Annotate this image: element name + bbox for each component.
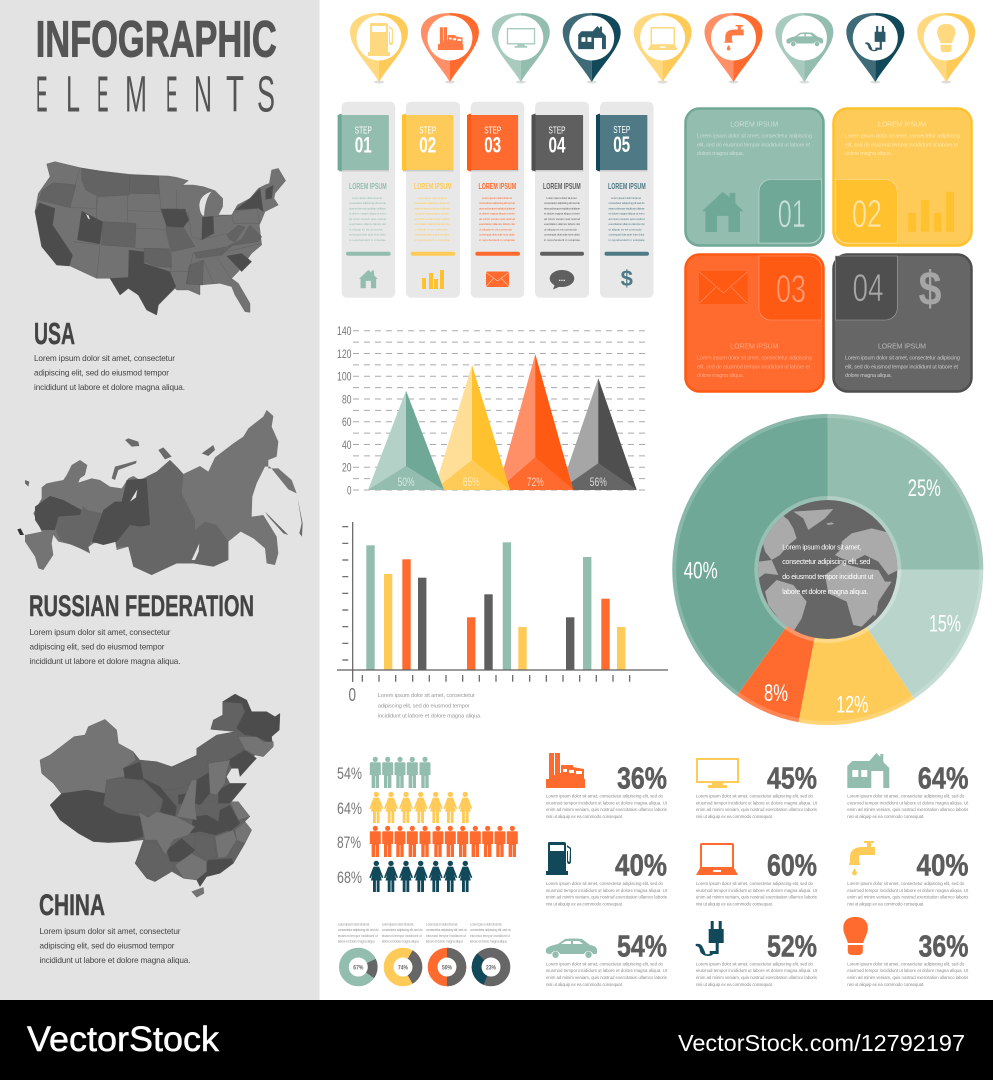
donut 50%: 50% <box>442 964 452 972</box>
step card 05: exercitation ullamco laboris nisi <box>608 222 645 226</box>
box 03: Lorem ipsum dolor sit amet, consectetur adipiscing <box>697 356 812 362</box>
step card 03: exercitation ullamco laboris nisi <box>479 222 515 226</box>
pie percentage labels <box>684 475 961 718</box>
row labels: 64% <box>337 799 362 818</box>
stat: bulb 36%: nisi ut aliquip ex ea commodo consequat. <box>847 982 924 987</box>
stat: monitor 45% <box>696 758 818 819</box>
box 01: LOREM IPSUM <box>730 122 778 128</box>
text: China description: Lorem ipsum dolor sit amet, consectetur <box>40 927 181 936</box>
step card 04: ... <box>559 274 565 283</box>
donut 74%: 74% <box>398 964 408 972</box>
stat: fuel pump 40%: enim ad minim veniam, quis nostrud exercitation ullamco laboris <box>546 895 668 900</box>
panel: numbered boxes <box>686 108 972 392</box>
box 02: LOREM IPSUM <box>878 122 926 128</box>
title second line: L <box>66 66 80 123</box>
step card 05: consequat duis aute irure dolor <box>608 232 645 236</box>
title <box>36 11 277 123</box>
step card 03: consequat duis aute irure dolor <box>479 232 515 236</box>
stat: bulb 36%: eiusmod tempor incididunt ut labore et dolore magna aliqua. Ut <box>847 968 969 973</box>
stat: factory 36%: 36% <box>617 760 667 796</box>
footer bar <box>0 1000 993 1080</box>
step card 05: consectetur adipiscing elit sed do <box>608 201 645 205</box>
y axis labels <box>337 324 352 497</box>
globe caption: labore et dolore magna aliqua. <box>782 589 868 596</box>
text: USA description: adipiscing elit, sed do eiusmod tempor <box>34 368 169 378</box>
stat: house 64%: eiusmod tempor incididunt ut labore et dolore magna aliqua. Ut <box>847 800 969 805</box>
text: USA description: incididunt ut labore et dolore magna aliqua. <box>34 383 185 392</box>
pyramid 50%: 50% <box>398 475 415 489</box>
step card 01: ut aliquip ex ea commodo <box>349 228 383 232</box>
stat: bulb 36%: Lorem ipsum dolor sit amet, consectetur adipiscing elit, sed do <box>847 961 965 966</box>
left panel <box>0 0 320 1000</box>
step card 03: ad minim veniam quis nostrud <box>479 217 515 221</box>
text: USA description <box>34 354 185 392</box>
stat: car 54%: Lorem ipsum dolor sit amet, consectetur adipiscing elit, sed do <box>546 961 664 966</box>
stat: house 64%: Lorem ipsum dolor sit amet, consectetur adipiscing elit, sed do <box>847 794 965 798</box>
stat: bulb 36%: 36% <box>918 928 968 964</box>
step card 05: et dolore magna aliqua ut enim <box>608 212 645 216</box>
bar chart caption: Lorem ipsum dolor sit amet, consectetur <box>378 693 475 699</box>
donut captions: labore et dolore magna aliqua <box>382 940 419 944</box>
pie percentage labels: 8% <box>764 680 788 707</box>
map: USA <box>35 162 286 315</box>
step card 04: Lorem ipsum dolor sit amet <box>546 196 577 200</box>
donut captions: Lorem ipsum dolor sit amet, <box>382 922 414 926</box>
stat: laptop 60%: enim ad minim veniam, quis nostrud exercitation ullamco laboris <box>696 895 818 900</box>
text: China description: adipiscing elit, sed do eiusmod tempor <box>40 942 175 950</box>
step card 03: ut aliquip ex ea commodo <box>479 228 512 232</box>
pie percentage labels: 25% <box>908 475 941 502</box>
donut 67% <box>339 948 377 986</box>
step card 01: consequat duis aute irure dolor <box>349 232 386 236</box>
stat: fuel pump 40%: eiusmod tempor incididunt ut labore et dolore magna aliqua. Ut <box>546 888 668 893</box>
step card 01: STEP <box>355 124 372 136</box>
donut captions: labore et dolore magna aliqua <box>338 940 375 944</box>
stat: faucet 40%: 40% <box>916 848 968 882</box>
step card 04: et dolore magna aliqua ut enim <box>544 212 581 216</box>
title second line: E <box>97 66 108 123</box>
step card 03 <box>467 102 524 298</box>
stat: house 64%: enim ad minim veniam, quis nostrud exercitation ullamco laboris <box>847 807 969 812</box>
map: China <box>40 694 280 897</box>
step card 03: eiusmod tempor incididunt ut labore <box>479 206 515 210</box>
chart: people pictogram <box>337 757 518 892</box>
stat: faucet 40% <box>847 841 969 907</box>
step card 02: Lorem ipsum dolor sit amet <box>417 196 447 200</box>
donut captions: eiusmod tempor incididunt ut <box>338 934 378 938</box>
y axis labels: 20 <box>342 461 352 475</box>
box 01 <box>686 108 824 246</box>
stat: faucet 40%: eiusmod tempor incididunt ut labore et dolore magna aliqua. Ut <box>847 888 969 893</box>
stat: laptop 60%: 60% <box>767 848 817 882</box>
text: Russia description: adipiscing elit, sed do eiusmod tempor <box>30 642 165 652</box>
row labels: 54% <box>337 764 362 783</box>
pin: factory <box>421 13 479 84</box>
y axis labels: 80 <box>342 392 352 406</box>
step card 05: in reprehenderit in voluptate <box>608 238 645 242</box>
map: Russian Federation <box>17 410 303 575</box>
text: Russia description: incididunt ut labore et dolore magna aliqua. <box>30 657 180 666</box>
pin: monitor <box>492 13 550 84</box>
box 04: $ <box>918 263 942 316</box>
footer bar: VectorStock <box>27 1020 220 1059</box>
step card 05: STEP <box>613 124 630 136</box>
step card 04: LOREM IPSUM <box>543 181 581 191</box>
donut 23% <box>472 948 510 986</box>
pie percentage labels: 12% <box>836 692 868 718</box>
title second line: E <box>166 66 178 123</box>
step card 03: 03 <box>484 132 501 158</box>
donut 74% <box>383 947 423 987</box>
step card 04: ad minim veniam quis nostrud <box>544 217 580 221</box>
box 04: 04 <box>852 267 884 310</box>
box 01: elit, sed do eiusmod tempor incididunt ut labore et <box>697 142 810 148</box>
step card 05: ad minim veniam quis nostrud <box>608 217 645 221</box>
stat: monitor 45%: nisi ut aliquip ex ea commodo consequat. <box>696 814 773 819</box>
bar chart caption: adipiscing elit, sed do eiusmod tempor <box>378 703 470 709</box>
pyramid 56%: 56% <box>590 475 607 489</box>
row 87% <box>370 826 518 857</box>
title: INFOGRAPHIC <box>36 11 277 68</box>
stat: faucet 40%: Lorem ipsum dolor sit amet, consectetur adipiscing elit, sed do <box>847 881 965 886</box>
pin: house <box>563 13 621 84</box>
box 02: dolore magna aliqua. <box>845 151 892 157</box>
stat: fuel pump 40% <box>546 842 668 907</box>
globe caption: Lorem ipsum dolor sit amet, <box>782 544 861 552</box>
chart: bar chart <box>337 522 668 720</box>
step card 02: ad minim veniam quis nostrud <box>414 217 450 221</box>
stat: plug 52%: eiusmod tempor incididunt ut labore et dolore magna aliqua. Ut <box>696 968 818 973</box>
stat: laptop 60%: Lorem ipsum dolor sit amet, consectetur adipiscing elit, sed do <box>696 881 814 886</box>
step card 04: consectetur adipiscing elit sed do <box>544 201 580 205</box>
box 02: elit, sed do eiusmod tempor incididunt ut labore et <box>845 142 958 148</box>
stat: factory 36%: nisi ut aliquip ex ea commodo consequat. <box>546 814 623 819</box>
step card 03: in reprehenderit in voluptate <box>479 238 515 242</box>
pin: fuel pump <box>350 13 408 84</box>
stat: monitor 45%: Lorem ipsum dolor sit amet, consectetur adipiscing elit, sed do <box>696 794 814 798</box>
box 04: LOREM IPSUM <box>878 344 926 350</box>
title second line: E <box>36 66 48 123</box>
y axis labels: 60 <box>342 415 352 429</box>
text: Russia description <box>30 628 180 666</box>
step card 01: ad minim veniam quis nostrud <box>349 217 386 221</box>
box 01: dolore magna aliqua. <box>697 151 744 157</box>
chart: pyramid chart <box>337 324 647 497</box>
step card 05: ut aliquip ex ea commodo <box>608 228 642 232</box>
stat: car 54% <box>546 928 668 987</box>
stat grid <box>546 753 969 987</box>
step card 05: $ <box>621 266 633 291</box>
step card 05: 05 <box>613 132 630 157</box>
stat: plug 52% <box>696 921 818 987</box>
step card 03: Lorem ipsum dolor sit amet <box>482 196 512 200</box>
donut charts with captions <box>338 922 511 987</box>
donut captions: Lorem ipsum dolor sit amet, <box>426 922 458 926</box>
step card 01: et dolore magna aliqua ut enim <box>349 212 387 216</box>
box 03: elit, sed do eiusmod tempor incididunt ut labore et <box>697 364 810 370</box>
stat: plug 52%: nisi ut aliquip ex ea commodo consequat. <box>696 982 773 987</box>
text: China description: incididunt ut labore et dolore magna aliqua. <box>40 956 190 965</box>
title second line: S <box>257 66 275 123</box>
donut captions: consectetur adipiscing elit, sed do <box>338 928 379 932</box>
step card 04: ut aliquip ex ea commodo <box>544 228 577 232</box>
stat: plug 52%: 52% <box>767 928 817 964</box>
step card 01: eiusmod tempor incididunt ut labore <box>349 206 386 210</box>
box 04: dolore magna aliqua. <box>845 373 892 379</box>
stat: plug 52%: enim ad minim veniam, quis nostrud exercitation ullamco laboris <box>696 975 818 980</box>
pin: plug <box>846 13 904 84</box>
y axis labels: 40 <box>342 438 352 452</box>
donut captions: eiusmod tempor incididunt ut <box>470 934 510 938</box>
box 03 <box>686 254 824 392</box>
pin: light bulb <box>917 13 975 84</box>
title second line <box>36 66 275 123</box>
stat: factory 36%: eiusmod tempor incididunt ut labore et dolore magna aliqua. Ut <box>546 800 668 805</box>
pie percentage labels: 15% <box>929 610 961 638</box>
title second line: N <box>194 66 212 123</box>
box 04: Lorem ipsum dolor sit amet, consectetur adipiscing <box>845 356 960 362</box>
step card 02: 02 <box>419 132 436 158</box>
stat: plug 52%: Lorem ipsum dolor sit amet, consectetur adipiscing elit, sed do <box>696 961 814 966</box>
donut 67%: 67% <box>353 964 363 972</box>
step card 02: et dolore magna aliqua ut enim <box>414 212 450 216</box>
step card 01: 01 <box>355 132 372 158</box>
stat: car 54%: 54% <box>617 928 667 964</box>
donut captions: labore et dolore magna aliqua <box>470 940 507 944</box>
donut captions <box>338 922 511 944</box>
row labels: 87% <box>337 833 361 852</box>
text: China description <box>40 927 190 965</box>
donut captions: consectetur adipiscing elit, sed do <box>382 928 423 932</box>
pyramid 65% <box>434 365 510 490</box>
step card 04: 04 <box>548 132 566 158</box>
pin: faucet <box>704 13 762 84</box>
y axis labels: 120 <box>337 347 352 361</box>
pin: car <box>775 13 833 84</box>
box 02: Lorem ipsum dolor sit amet, consectetur adipiscing <box>845 134 960 140</box>
stat: fuel pump 40%: nisi ut aliquip ex ea commodo consequat. <box>546 902 623 907</box>
pyramid 50% <box>368 391 444 490</box>
row 68% <box>369 861 472 892</box>
stat: car 54%: nisi ut aliquip ex ea commodo consequat. <box>546 982 623 987</box>
donut 50% <box>433 953 461 981</box>
step card 01 <box>338 102 395 298</box>
step card 03: et dolore magna aliqua ut enim <box>479 212 516 216</box>
stat: factory 36%: enim ad minim veniam, quis nostrud exercitation ullamco laboris <box>546 807 668 812</box>
step card 03: STEP <box>484 124 501 136</box>
donut captions: Lorem ipsum dolor sit amet, <box>338 922 370 926</box>
stat: factory 36% <box>546 753 668 819</box>
stat: laptop 60% <box>696 843 818 907</box>
step card 03: consectetur adipiscing elit sed do <box>479 201 515 205</box>
pyramid 72% <box>498 354 573 490</box>
pyramid 72%: 72% <box>527 475 544 489</box>
step card 04: exercitation ullamco laboris nisi <box>544 222 580 226</box>
title second line: T <box>226 66 244 123</box>
step card 02 <box>402 102 460 298</box>
box 04 <box>834 254 972 392</box>
step card 04: in reprehenderit in voluptate <box>544 238 580 242</box>
y axis labels: 140 <box>337 324 352 338</box>
donut captions: eiusmod tempor incididunt ut <box>382 934 422 938</box>
step card 01: Lorem ipsum dolor sit amet <box>352 196 382 200</box>
step card 02: STEP <box>419 124 436 136</box>
box 01: 01 <box>778 193 806 236</box>
chart: donut pie with globe <box>672 414 983 725</box>
pyramid 65%: 65% <box>463 475 480 489</box>
box 02: 02 <box>852 193 882 236</box>
globe <box>755 500 902 639</box>
step card 05: Lorem ipsum dolor sit amet <box>611 196 641 200</box>
axis zero label: 0 <box>349 685 356 705</box>
stat: car 54%: eiusmod tempor incididunt ut labore et dolore magna aliqua. Ut <box>546 968 668 973</box>
panel: step cards <box>338 102 654 298</box>
step card 02: consequat duis aute irure dolor <box>414 232 450 236</box>
y axis labels: 0 <box>347 483 352 497</box>
donut captions: consectetur adipiscing elit, sed do <box>470 928 511 932</box>
step card 02: consectetur adipiscing elit sed do <box>414 201 450 205</box>
row labels <box>337 764 362 887</box>
heading: Russian Federation: RUSSIAN FEDERATION <box>29 590 254 623</box>
donut 23%: 23% <box>486 964 496 972</box>
stat: house 64%: nisi ut aliquip ex ea commodo consequat. <box>847 814 924 819</box>
stat: monitor 45%: eiusmod tempor incididunt ut labore et dolore magna aliqua. Ut <box>696 800 818 805</box>
donut captions: consectetur adipiscing elit, sed do <box>426 928 467 932</box>
stat: house 64%: 64% <box>918 760 968 796</box>
pyramid 56% <box>560 378 637 490</box>
step card 01: consectetur adipiscing elit sed do <box>349 201 386 205</box>
step card 05 <box>596 102 654 298</box>
donut captions: eiusmod tempor incididunt ut <box>426 934 466 938</box>
step card 04: eiusmod tempor incididunt ut labore <box>544 206 580 210</box>
box 02 <box>834 108 972 246</box>
stat: faucet 40%: enim ad minim veniam, quis nostrud exercitation ullamco laboris <box>847 895 969 900</box>
donut captions: Lorem ipsum dolor sit amet, <box>470 922 502 926</box>
globe caption: consectetur adipiscing elit, sed <box>782 559 870 566</box>
step card 05: eiusmod tempor incididunt ut labore <box>608 206 645 210</box>
stat: laptop 60%: nisi ut aliquip ex ea commodo consequat. <box>696 902 773 907</box>
step card 01: exercitation ullamco laboris nisi <box>349 222 386 226</box>
step card 04: consequat duis aute irure dolor <box>544 232 580 236</box>
heading: USA: USA <box>34 316 75 351</box>
text: Russia description: Lorem ipsum dolor sit amet, consectetur <box>30 628 171 637</box>
step card 02: ut aliquip ex ea commodo <box>414 228 448 232</box>
pin: laptop <box>634 13 692 84</box>
heading: China: CHINA <box>39 889 105 922</box>
stat: house 64% <box>847 753 969 819</box>
pie percentage labels: 40% <box>684 558 718 584</box>
box 03: 03 <box>776 268 806 311</box>
footer bar: VectorStock.com/12792197 <box>678 1030 965 1056</box>
row 64% <box>369 792 472 823</box>
globe caption: do eiusmod tempor incididunt ut <box>782 574 873 581</box>
box 04: elit, sed do eiusmod tempor incididunt ut labore et <box>845 364 958 370</box>
step card 03: LOREM IPSUM <box>478 181 516 191</box>
box 03: LOREM IPSUM <box>730 344 778 350</box>
step card 02: in reprehenderit in voluptate <box>414 238 450 242</box>
stat: fuel pump 40%: Lorem ipsum dolor sit amet, consectetur adipiscing elit, sed do <box>546 881 664 886</box>
row of map pins <box>350 13 975 84</box>
stat: laptop 60%: eiusmod tempor incididunt ut labore et dolore magna aliqua. Ut <box>696 888 818 893</box>
step card 01: in reprehenderit in voluptate <box>349 238 386 242</box>
step card 05: LOREM IPSUM <box>608 181 646 191</box>
stat: monitor 45%: 45% <box>767 760 817 796</box>
row labels: 68% <box>337 868 362 887</box>
stat: factory 36%: Lorem ipsum dolor sit amet, consectetur adipiscing elit, sed do <box>546 794 664 798</box>
y axis labels: 100 <box>337 370 352 384</box>
step card 02: LOREM IPSUM <box>414 181 452 191</box>
stat: bulb 36%: enim ad minim veniam, quis nostrud exercitation ullamco laboris <box>847 975 969 980</box>
stat: bulb 36% <box>843 917 969 987</box>
row 54% <box>370 757 430 788</box>
box 01: Lorem ipsum dolor sit amet, consectetur adipiscing <box>697 134 812 140</box>
stat: fuel pump 40%: 40% <box>615 848 667 882</box>
step card 04 <box>532 102 589 298</box>
step card 04: STEP <box>548 124 566 136</box>
step card 02: eiusmod tempor incididunt ut labore <box>414 206 450 210</box>
box 03: dolore magna aliqua. <box>697 373 744 379</box>
text: USA description: Lorem ipsum dolor sit amet, consectetur <box>34 354 175 363</box>
title second line: M <box>125 66 147 123</box>
stat: car 54%: enim ad minim veniam, quis nostrud exercitation ullamco laboris <box>546 975 668 980</box>
step card 01: LOREM IPSUM <box>349 181 387 191</box>
stat: faucet 40%: nisi ut aliquip ex ea commodo consequat. <box>847 902 924 907</box>
donut captions: labore et dolore magna aliqua <box>426 940 463 944</box>
bar chart caption: incididunt ut labore et dolore magna aliqua. <box>378 714 482 720</box>
step card 02: exercitation ullamco laboris nisi <box>414 222 450 226</box>
stat: monitor 45%: enim ad minim veniam, quis nostrud exercitation ullamco laboris <box>696 807 818 812</box>
